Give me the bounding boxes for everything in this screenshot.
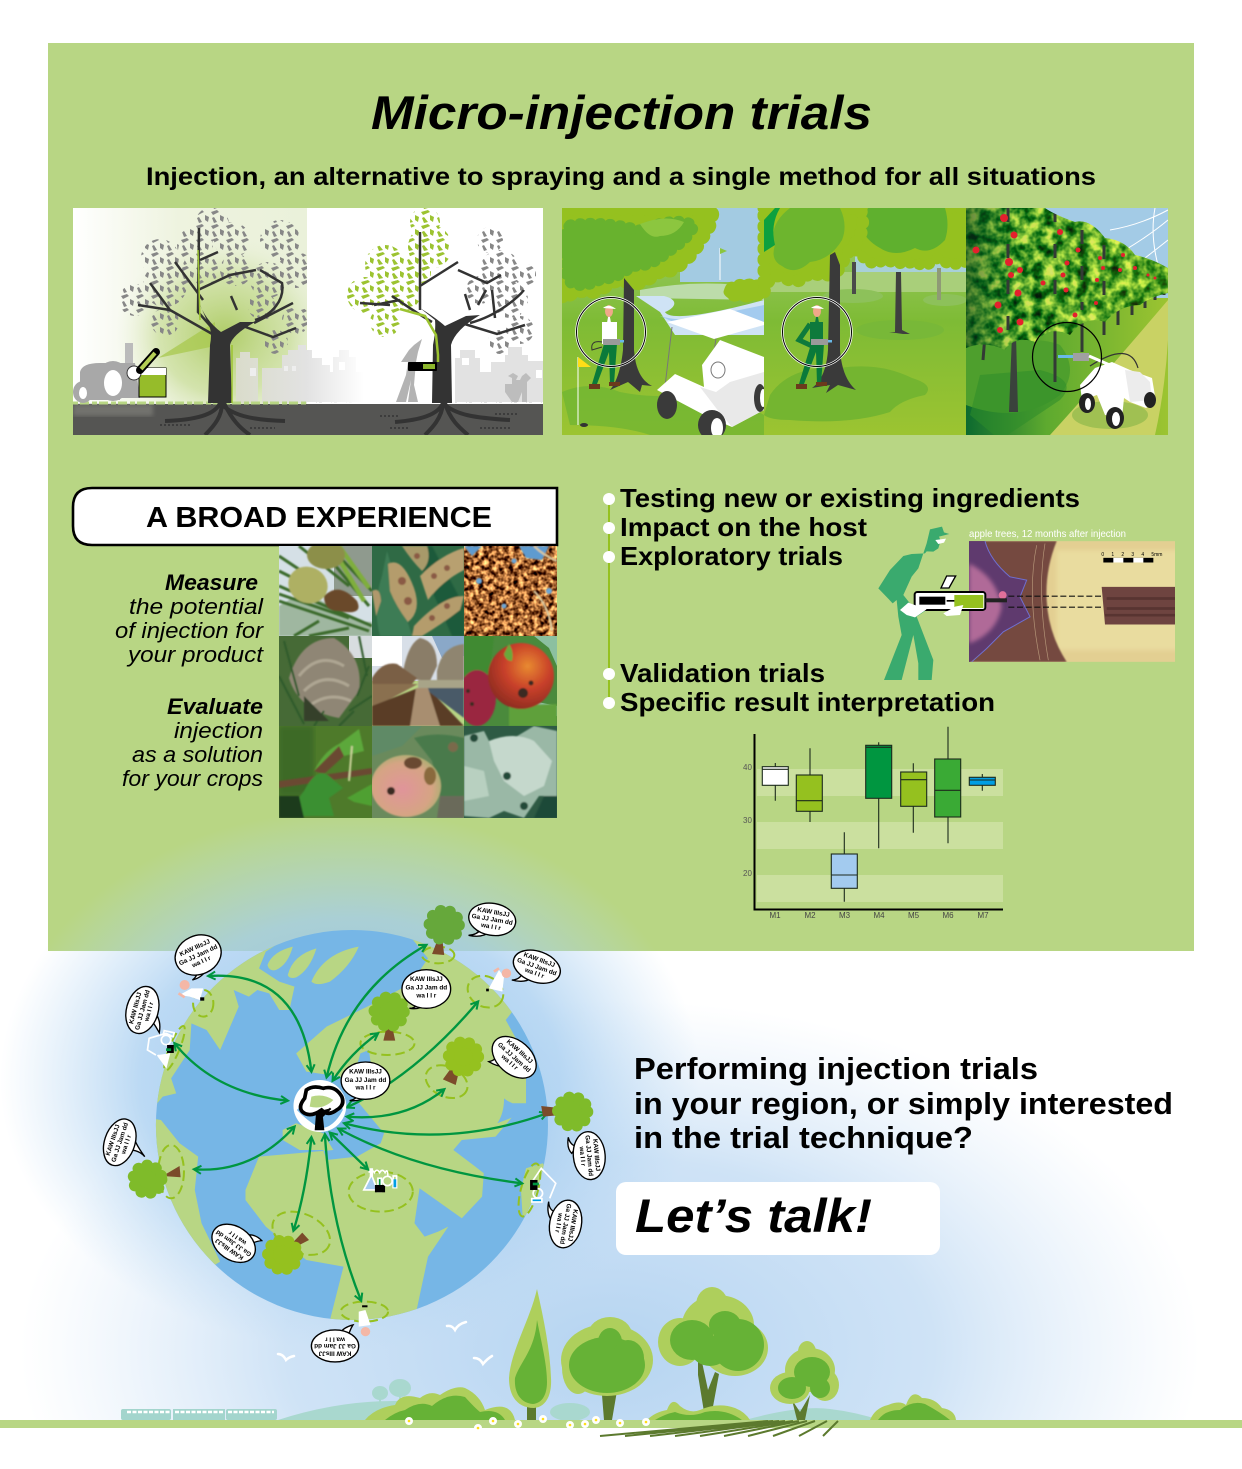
speech bubbles: KAW IIIsJJ <box>128 991 143 1025</box>
call to action text: Performing injection trials <box>634 1051 1038 1086</box>
text block: measure: the potential <box>129 594 264 619</box>
speech bubbles: wa I I r <box>143 1001 156 1023</box>
speech bubbles: wa I I r <box>120 1134 133 1156</box>
speech bubbles: KAW IIIsJJ <box>591 1139 601 1172</box>
speech bubbles: wa I I r <box>578 1145 586 1167</box>
y axis labels <box>743 763 752 878</box>
micrograph: wood section after injection: 3 <box>1131 552 1134 558</box>
lab glassware icons <box>147 1031 556 1202</box>
y axis labels: 40 <box>743 763 752 772</box>
speech bubbles: KAW IIIsJJ <box>477 906 511 919</box>
photo: powdery mildew leaf <box>464 726 557 818</box>
tree: round left <box>561 1317 653 1420</box>
text block: evaluate: injection <box>174 718 263 743</box>
y axis labels: 20 <box>743 869 752 878</box>
bush center <box>647 1402 750 1420</box>
speech bubbles: KAW IIIsJJ <box>505 1038 534 1065</box>
let's talk box: Let’s talk! <box>635 1189 872 1242</box>
micrograph: wood section after injection: 5mm <box>1151 552 1162 558</box>
speech bubbles: KAW IIIsJJ <box>410 976 443 983</box>
x axis labels: M7 <box>977 911 989 920</box>
chart axes <box>754 734 1003 910</box>
speech bubbles: Ga JJ Jam dd <box>215 1228 253 1258</box>
heading box: a broad experience <box>73 488 557 545</box>
icon: worker holding injector <box>878 527 1007 680</box>
ground strip <box>0 1420 1242 1428</box>
text block: measure <box>115 570 265 667</box>
hills <box>278 1401 880 1420</box>
panel: pixel illustration spraying versus injection <box>73 208 543 435</box>
speech bubbles: Ga JJ Jam dd <box>405 985 447 992</box>
text block: evaluate: Evaluate <box>167 694 263 719</box>
x axis labels: M3 <box>839 911 851 920</box>
micrograph: wood section after injection <box>969 541 1175 662</box>
call to action text <box>634 1051 1173 1155</box>
text block: measure: Measure <box>165 570 258 595</box>
green top panel <box>48 43 1194 951</box>
heading box: a broad experience: A BROAD EXPERIENCE <box>146 502 492 534</box>
speech bubbles: wa I I r <box>325 1335 346 1342</box>
subtitle: Injection, an alternative to spraying and a single method for all situations <box>146 163 1096 191</box>
x axis labels: M4 <box>873 911 885 920</box>
micrograph: wood section after injection: 1 <box>1111 552 1114 558</box>
tree: injected <box>347 207 536 403</box>
bullet list with vertical line: Validation trials <box>620 658 825 688</box>
speech bubbles <box>98 900 607 1362</box>
photo: curled leaf <box>279 726 372 818</box>
bullet list with vertical line <box>603 483 1080 717</box>
worker with injector <box>396 339 437 402</box>
x axis labels: M5 <box>908 911 920 920</box>
micrograph: wood section after injection: 2 <box>1121 552 1124 558</box>
speech bubbles: wa I I r <box>227 1229 249 1246</box>
x axis labels: M1 <box>769 911 781 920</box>
city silhouette <box>236 345 543 403</box>
text block: measure: of injection for <box>115 618 265 643</box>
photo: apples with holes <box>464 636 557 726</box>
photo grid of crop diseases <box>279 541 557 818</box>
x axis labels <box>769 911 989 920</box>
box plot chart <box>743 727 1003 920</box>
text block: evaluate: for your crops <box>122 766 263 791</box>
speech bubbles: wa I I r <box>523 966 545 980</box>
speech bubbles: wa I I r <box>415 993 437 1000</box>
speech bubbles: wa I I r <box>479 922 502 932</box>
speech bubbles: KAW IIIsJJ <box>179 938 212 958</box>
speech bubbles: KAW IIIsJJ <box>566 1209 579 1242</box>
x axis labels: M6 <box>942 911 954 920</box>
bullet list with vertical line: Exploratory trials <box>620 541 843 571</box>
globe ocean <box>156 930 548 1320</box>
call to action text: in the trial technique? <box>634 1120 973 1155</box>
speech bubbles: Ga JJ Jam dd <box>110 1122 130 1163</box>
speech bubbles: Ga JJ Jam dd <box>345 1077 386 1084</box>
speech bubbles: wa I I r <box>499 1053 519 1072</box>
field lines <box>600 1421 838 1436</box>
text block: evaluate <box>122 694 263 791</box>
speech bubbles: Ga JJ Jam dd <box>471 913 513 927</box>
let's talk box <box>616 1182 940 1255</box>
birds <box>278 1322 492 1364</box>
central logo <box>293 1080 346 1132</box>
speech bubbles: KAW IIIsJJ <box>105 1123 122 1157</box>
bush left <box>365 1387 515 1420</box>
text block: evaluate: as a solution <box>132 742 263 767</box>
tree: tall right <box>658 1287 768 1412</box>
bush right <box>870 1394 956 1420</box>
chart bands <box>757 769 1003 902</box>
flowers <box>406 1416 649 1431</box>
tree: sprayed <box>119 207 314 403</box>
micrograph: wood section after injection: 4 <box>1141 552 1144 558</box>
scene: orchard <box>966 208 1168 440</box>
photo: leaf with brown spots <box>372 546 464 636</box>
spray cone <box>158 322 215 358</box>
train <box>121 1409 277 1420</box>
speech bubbles: KAW IIIsJJ <box>349 1068 382 1075</box>
speech bubbles: wa I I r <box>553 1211 564 1234</box>
scene: golf course <box>562 208 766 440</box>
tree sites <box>133 910 588 1270</box>
landscape <box>0 1287 1242 1436</box>
photo: canal with plane trees <box>372 636 464 726</box>
right scene background <box>307 208 543 404</box>
speech bubbles: KAW IIIsJJ <box>318 1349 351 1356</box>
globe network <box>98 900 607 1362</box>
title: Micro-injection trials <box>371 86 872 139</box>
double headed arrows <box>174 945 547 1301</box>
speech bubbles: wa I I r <box>190 955 213 970</box>
dashed site rings <box>158 947 545 1322</box>
speech bubbles: KAW IIIsJJ <box>214 1237 245 1261</box>
small teal trees <box>372 1379 590 1421</box>
speech bubbles: wa I I r <box>354 1084 376 1091</box>
scientist figures <box>179 968 511 1336</box>
micrograph caption: apple trees, 12 months after injection <box>969 528 1126 540</box>
text block: measure: your product <box>126 642 264 667</box>
speech bubbles: Ga JJ Jam dd <box>134 989 152 1031</box>
panel: golf course, park and orchard scenes <box>562 208 1168 435</box>
tree: cypress <box>509 1289 551 1420</box>
lens circles <box>576 298 1102 392</box>
bullet list with vertical line: Testing new or existing ingredients <box>620 483 1080 513</box>
ground and roots <box>73 403 543 435</box>
globe land masses <box>156 940 544 1320</box>
tractor <box>73 343 166 403</box>
speech bubbles: Ga JJ Jam dd <box>516 957 558 977</box>
left scene background <box>73 208 307 404</box>
spray glow <box>115 235 335 435</box>
scene: park <box>764 208 967 435</box>
speech bubbles: Ga JJ Jam dd <box>496 1041 532 1074</box>
micrograph: wood section after injection: 0 <box>1101 552 1104 558</box>
y axis labels: 30 <box>743 816 752 825</box>
speech bubbles: KAW IIIsJJ <box>523 951 556 969</box>
photo: pine cones <box>279 546 372 636</box>
speech bubbles: Ga JJ Jam dd <box>558 1203 572 1245</box>
sky glow background <box>0 800 1242 1420</box>
photo: autumn branches <box>464 546 557 636</box>
tree: small right <box>770 1341 839 1420</box>
speech bubbles: Ga JJ Jam dd <box>178 944 219 967</box>
x axis labels: M2 <box>804 911 816 920</box>
speech bubbles: Ga JJ Jam dd <box>314 1342 356 1349</box>
photo: scab apple <box>372 726 464 818</box>
bullet list with vertical line: Impact on the host <box>620 512 867 542</box>
speech bubbles: Ga JJ Jam dd <box>583 1135 594 1177</box>
photo: caterpillar nest <box>279 636 372 726</box>
bullet list with vertical line: Specific result interpretation <box>620 687 995 717</box>
call to action text: in your region, or simply interested <box>634 1086 1173 1121</box>
boxes and whiskers <box>762 727 995 902</box>
children silhouettes <box>505 373 531 402</box>
